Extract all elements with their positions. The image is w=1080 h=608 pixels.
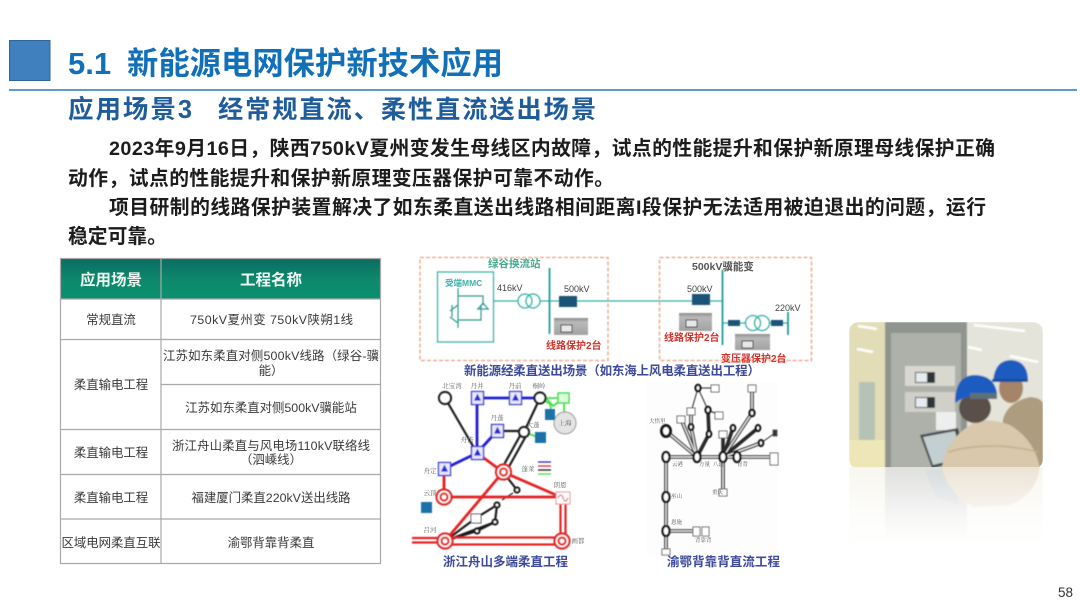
diagram labels: 220kV [775, 303, 801, 313]
cabinet [885, 322, 967, 469]
table grid [60, 258, 380, 564]
photo reflection [849, 467, 1043, 520]
station names: 背靠背 [695, 536, 712, 544]
station names: 蓬莱 [522, 464, 535, 473]
diagram labels: 500kV [564, 284, 590, 294]
blue lines [444, 398, 540, 469]
table row 1 [86, 312, 353, 327]
laptop [920, 428, 960, 468]
title: 新能源电网保护新技术应用 [127, 46, 503, 81]
diagram labels: 受端MMC [445, 278, 482, 288]
table row 5 [61, 535, 314, 550]
station names: 八道 [713, 460, 725, 468]
photo: engineers at protection cabinet [849, 322, 1043, 520]
station names: 桐岭 [532, 381, 546, 390]
station names: 丹前 [508, 381, 522, 390]
diagram labels: 绿谷换流站 [488, 257, 541, 270]
legend swatches [538, 462, 551, 474]
electrical lines [493, 268, 788, 345]
table row 3: 柔直输电工程 [74, 445, 148, 460]
table: projects [60, 258, 380, 564]
station names: 丹井 [470, 381, 484, 390]
back worker [1000, 397, 1043, 469]
station names: 朗恩 [554, 480, 567, 489]
front worker [942, 421, 1040, 469]
converter boxes [662, 385, 778, 555]
station names: 青背 [737, 460, 749, 468]
caption: 渝鄂背靠背直流工程 [667, 554, 780, 569]
diagram labels: 变压器保护2台 [721, 352, 787, 365]
station names: 吕河 [424, 525, 437, 534]
diagram labels: 416kV [497, 283, 523, 293]
station names: 丹蓬 [490, 413, 504, 422]
ceiling lights [857, 325, 1038, 362]
diagram labels: 500kV骥能变 [692, 260, 754, 273]
body text: 动作，试点的性能提升和保护新原理变压器保护可靠不动作。 [68, 167, 614, 190]
red lines [412, 453, 566, 544]
table row 4 [74, 490, 351, 505]
station names: 上海 [558, 418, 572, 427]
table row 2: 江苏如东柔直对侧500kV骥能站 [185, 400, 357, 415]
title: 5.1 [68, 46, 111, 81]
body text: 2023年9月16日，陕西750kV夏州变发生母线区内故障，试点的性能提升和保护新原理母线保护正确 [109, 137, 995, 160]
table row 2 [74, 348, 379, 415]
diagram: offshore wind flexible DC scenario [420, 257, 812, 378]
table row 4: 福建厦门柔直220kV送出线路 [191, 490, 351, 505]
panel background [646, 382, 778, 555]
table row 2: 柔直输电工程 [74, 377, 148, 392]
single lines [691, 388, 775, 443]
panel: Lvgu converter station [420, 258, 608, 360]
caption: 新能源经柔直送出场景（如东海上风电柔直送出工程） [464, 363, 760, 378]
station names: 重庆 [712, 488, 724, 496]
station names [649, 417, 749, 544]
subtitle: 经常规直流、柔性直流送出场景 [218, 96, 596, 124]
red double-ring stations [436, 464, 570, 548]
black substations [439, 392, 546, 534]
double lines inner [666, 389, 772, 552]
title rule [9, 89, 1077, 91]
diagram: Zhoushan multi-terminal flexible DC [412, 381, 585, 569]
subtitle [68, 95, 596, 124]
icon: MMC converter [438, 272, 494, 342]
breakers [559, 294, 783, 326]
protection devices [554, 313, 770, 350]
Shanghai load and wind icons [421, 393, 576, 513]
station names: 画都 [572, 536, 585, 545]
table row 1: 750kV夏州变 750kV陕朔1线 [190, 312, 353, 327]
table row 1: 常规直流 [86, 312, 136, 327]
table row 3: （泗嵊线） [240, 453, 302, 467]
station names: 北宝湾 [442, 381, 462, 390]
diagram labels [445, 257, 801, 365]
body text: 项目研制的线路保护装置解决了如东柔直送出线路相间距离I段保护无法适用被迫退出的问题，运行 [109, 196, 986, 219]
station names: 云港 [672, 460, 684, 468]
panel: 500kV Jineng substation [660, 258, 812, 360]
station names: 巫山 [671, 492, 683, 500]
diagram labels: 线路保护2台 [546, 339, 602, 352]
subtitle: 应用场景3 [68, 95, 192, 124]
page number: 58 [1058, 585, 1073, 600]
table row 3: 浙江舟山柔直与风电场110kV联络线 [172, 438, 370, 453]
table header: 应用场景 [80, 270, 142, 289]
table row 2: 江苏如东柔直对侧500kV线路（绿谷-骥 [163, 348, 379, 363]
station names [424, 381, 585, 545]
green lines [524, 398, 564, 438]
table row 4: 柔直输电工程 [74, 490, 148, 505]
converter boxes [471, 492, 570, 523]
body text [68, 137, 995, 248]
bus nodes [662, 385, 763, 536]
station names: 舟定 [424, 466, 437, 475]
table row 5: 区域电网柔直互联 [61, 536, 161, 550]
blue converter stations [438, 392, 522, 476]
diagram labels: 500kV [687, 284, 713, 294]
icon: title square [10, 40, 50, 80]
station names: 方量 [699, 460, 711, 468]
black lines [445, 398, 540, 541]
diagram: Yu-E back-to-back DC [646, 382, 780, 569]
station names: 云顶 [424, 489, 437, 497]
table row 2: 能） [259, 364, 283, 378]
station names: 恩施 [671, 518, 683, 526]
station names: 舟岱 [460, 435, 474, 444]
body text: 稳定可靠。 [68, 225, 167, 248]
station names: 大悟里 [649, 417, 666, 425]
diagram labels: 线路保护2台 [664, 331, 720, 344]
table row 3 [74, 438, 370, 467]
table row 5: 渝鄂背靠背柔直 [228, 535, 314, 550]
caption: 浙江舟山多端柔直工程 [443, 554, 568, 569]
photo image [849, 322, 1043, 469]
table header: 工程名称 [240, 271, 302, 289]
station names: 大蓬 [526, 420, 540, 429]
double lines outer [666, 389, 772, 552]
table header [60, 258, 380, 298]
